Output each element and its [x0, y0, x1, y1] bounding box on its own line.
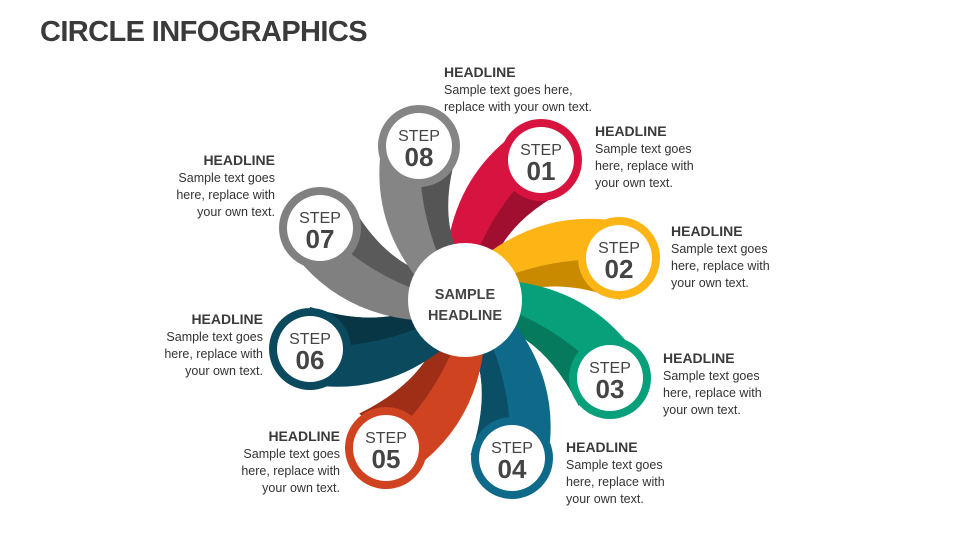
text: step 05: Sample text goes	[243, 447, 340, 461]
text: step 02: HEADLINE	[671, 223, 743, 239]
text: step 07: Sample text goes	[178, 171, 275, 185]
text: step 08: HEADLINE	[444, 64, 516, 80]
step 07: 07	[306, 224, 334, 254]
text: step 05: HEADLINE	[268, 428, 340, 444]
text: step 06: HEADLINE	[191, 311, 263, 327]
step 05	[345, 407, 427, 489]
step 08: 08	[405, 142, 433, 172]
text: step 06	[164, 311, 263, 378]
text: step 02: Sample text goes	[671, 242, 768, 256]
text: step 02	[671, 223, 770, 290]
step 07: STEP	[299, 210, 341, 227]
text: step 03	[663, 350, 762, 417]
step 07	[279, 187, 361, 269]
text: step 05: here, replace with	[241, 464, 340, 478]
text: step 01: Sample text goes	[595, 142, 692, 156]
step 03: STEP	[589, 360, 631, 377]
step 06: 06	[296, 345, 324, 375]
text: step 01: here, replace with	[595, 159, 694, 173]
text: step 03: Sample text goes	[663, 369, 760, 383]
step 04: 04	[498, 454, 527, 484]
text: step 06: your own text.	[185, 364, 263, 378]
title: CIRCLE INFOGRAPHICS	[40, 16, 367, 48]
step 01: 01	[527, 156, 555, 186]
text: step 04: Sample text goes	[566, 458, 663, 472]
text: step 04: your own text.	[566, 492, 644, 506]
text: step 04	[566, 439, 665, 506]
text: step 03: HEADLINE	[663, 350, 735, 366]
text: step 02: here, replace with	[671, 259, 770, 273]
text: step 08	[444, 64, 592, 114]
step 03	[569, 337, 651, 419]
text: step 07	[176, 152, 275, 219]
arms	[298, 135, 631, 466]
text: step 03: here, replace with	[663, 386, 762, 400]
step 03: 03	[596, 374, 624, 404]
step 01: STEP	[520, 142, 562, 159]
step 04	[471, 417, 553, 499]
step 01	[500, 119, 582, 201]
text: step 07: your own text.	[197, 205, 275, 219]
step 06: STEP	[289, 331, 331, 348]
step 05: STEP	[365, 430, 407, 447]
center circle: SAMPLE	[435, 287, 496, 303]
text: step 04: here, replace with	[566, 475, 665, 489]
text: step 01: your own text.	[595, 176, 673, 190]
step 06	[269, 308, 351, 390]
step 04: STEP	[491, 440, 533, 457]
text: step 07: HEADLINE	[203, 152, 275, 168]
text: step 06: Sample text goes	[166, 330, 263, 344]
text: step 05	[241, 428, 340, 495]
text: step 05: your own text.	[262, 481, 340, 495]
step 08	[378, 105, 460, 187]
text: step 04: HEADLINE	[566, 439, 638, 455]
text: step 01: HEADLINE	[595, 123, 667, 139]
text: step 02: your own text.	[671, 276, 749, 290]
center circle: HEADLINE	[428, 308, 502, 324]
text: step 08: replace with your own text.	[444, 100, 592, 114]
step 02: STEP	[598, 240, 640, 257]
text: step 08: Sample text goes here,	[444, 83, 573, 97]
text: step 01	[595, 123, 694, 190]
text: step 06: here, replace with	[164, 347, 263, 361]
step 08: STEP	[398, 128, 440, 145]
step 02	[578, 217, 660, 299]
center circle	[408, 243, 522, 357]
text: step 03: your own text.	[663, 403, 741, 417]
step 05: 05	[372, 444, 400, 474]
step 02: 02	[605, 254, 633, 284]
text: step 07: here, replace with	[176, 188, 275, 202]
